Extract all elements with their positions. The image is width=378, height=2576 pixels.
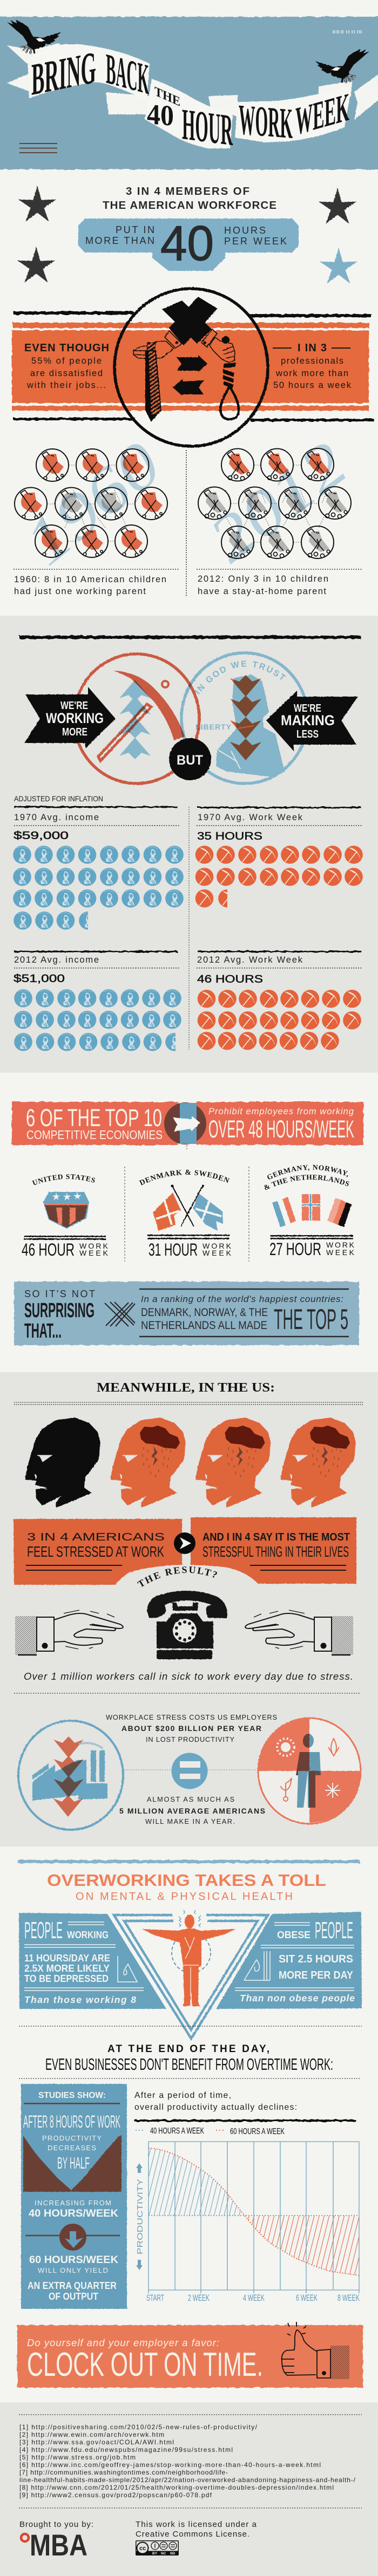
- block: 1970 income: [13, 806, 184, 930]
- stroller 7: [135, 487, 167, 520]
- right text: [273, 342, 352, 390]
- source list: [7] http://communities.washingtontimes.com/neighborhood/life-: [19, 2469, 228, 2476]
- heading: 3 in 4 members: THE AMERICAN WORKFORCE: [103, 199, 276, 212]
- cost text bottom: WILL MAKE IN A YEAR.: [145, 1817, 235, 1825]
- double rule: [147, 1235, 230, 1239]
- left text: [27, 1531, 165, 1560]
- 60 hours curve: [148, 2148, 359, 2275]
- x axis labels: [146, 2293, 360, 2303]
- heading: overworking takes a toll: OVERWORKING TAKES A TOLL: [47, 1871, 326, 1890]
- badge: but: BUT: [177, 753, 203, 768]
- panel: studies show: [21, 2084, 127, 2309]
- block: 2012 income: $51,000: [14, 973, 65, 985]
- circle outline: [114, 289, 268, 446]
- license text: [136, 2520, 257, 2539]
- ranking text: NETHERLANDS ALL MADE: [141, 1319, 267, 1332]
- caption 2012: have a stay-at-home parent: [198, 587, 326, 596]
- icon: up chevrons: [119, 680, 151, 759]
- panel: people working: TO BE DEPRESSED: [24, 1973, 109, 1984]
- icon: pickaxe coin: [74, 654, 199, 783]
- column: germany norway netherlands: [265, 1164, 355, 1259]
- ribbon: making less: LESS: [296, 728, 319, 740]
- legend: [136, 2127, 285, 2136]
- heading: at the end of the day: AT THE END OF THE DAY,: [107, 2043, 269, 2055]
- block: 1970 work week: [195, 807, 363, 908]
- panel: people working: WORKING: [67, 1930, 109, 1940]
- stroller 8 grey: [221, 526, 254, 558]
- stroller 6 grey: [279, 487, 311, 519]
- icon: three flags: [272, 1194, 352, 1227]
- big number 40: 40: [160, 216, 214, 271]
- icon: star top right: [319, 188, 356, 224]
- left text: COMPETITIVE ECONOMIES: [26, 1128, 163, 1142]
- source list: [3] http://www.ssa.gov/oact/COLA/AWI.html: [19, 2438, 174, 2446]
- source list: [6] http://www.inc.com/geoffrey-james/stop-working-more-than-40-hours-a-week.html: [19, 2461, 321, 2469]
- left text: EVEN THOUGH: [24, 342, 109, 354]
- column: denmark and sweden: DENMARK & SWEDEN: [139, 1170, 230, 1185]
- so it's not surprising that: SURPRISING: [24, 1299, 94, 1322]
- left text: [26, 1104, 163, 1142]
- panel: clock out on time: CLOCK OUT ON TIME.: [27, 2346, 263, 2383]
- left text: 3 IN 4 AMERICANS: [27, 1531, 165, 1543]
- source list: [8] http://www.cnn.com/2012/01/25/health/working-overtime-doubles-depression/index.html: [19, 2484, 334, 2491]
- panel: people working: [19, 1913, 166, 2009]
- icon: person circle: [258, 1718, 361, 1824]
- cost text top: [106, 1713, 277, 1743]
- x axis labels: 6 WEEK: [296, 2293, 318, 2303]
- ribbon: working more: [24, 687, 116, 748]
- y axis label: [136, 2163, 145, 2270]
- icon: crossed lines: [105, 1302, 135, 1326]
- panel: studies show: INCREASING FROM: [35, 2199, 111, 2207]
- right text: work more than: [275, 369, 348, 378]
- pick rows: [195, 846, 363, 908]
- double rule: [24, 1236, 106, 1240]
- source list: [1] http://positivesharing.com/2010/02/5-new-rules-of-productivity/: [19, 2423, 258, 2431]
- icon: stressed head 1: [110, 1418, 186, 1508]
- icon: star bottom left: [17, 247, 55, 283]
- ribbon: making less: MAKING: [281, 712, 335, 728]
- badge: creative commons: cc: [139, 2545, 146, 2552]
- title: bring back the 40 hour work week: [31, 42, 349, 155]
- block: 1970 income: 1970 Avg. income: [14, 813, 99, 822]
- stroller 5 grey: [55, 488, 87, 520]
- stroller 1: [221, 449, 254, 481]
- pick rows: [198, 990, 361, 1050]
- panel: studies show: OF OUTPUT: [49, 2291, 98, 2302]
- 27 hour work week: 27 HOUR: [269, 1239, 321, 1259]
- salmon panels: [12, 1102, 363, 1145]
- section: meanwhile in the us: [0, 1372, 378, 1846]
- ranking text: In a ranking of the world's happiest countries:: [141, 1294, 343, 1304]
- grey background: [0, 1372, 378, 1846]
- icon: penny coin: LIBERTY: [195, 723, 232, 731]
- y axis label: PRODUCTIVITY: [136, 2179, 145, 2254]
- stroller 8: [35, 525, 68, 557]
- grey background: [0, 616, 378, 1073]
- stroller 4 grey: [198, 487, 231, 519]
- blue plaque: [78, 219, 299, 271]
- panel: obese people: MORE PER DAY: [279, 1970, 354, 1981]
- panel: people working: PEOPLE: [24, 1917, 63, 1944]
- icon: right arrow: [177, 355, 207, 372]
- legend: 40 HOURS A WEEK: [150, 2127, 204, 2136]
- text: call in sick: Over 1 million workers call in sick to work every day due to stress.: [24, 1671, 353, 1682]
- panel: people working: 11 HOURS/DAY ARE: [24, 1953, 110, 1964]
- put in more than: [85, 224, 154, 246]
- panel: studies show: 40 HOURS/WEEK: [29, 2208, 118, 2219]
- penny rows: [14, 989, 184, 1051]
- grid: [148, 2142, 359, 2293]
- icon: down chevrons: [230, 675, 261, 760]
- right text: I IN 3: [298, 342, 327, 354]
- icon: brown valley: [23, 2135, 122, 2192]
- panel: stress orange: [14, 1517, 356, 1585]
- icon: stressed head 2: [195, 1418, 271, 1508]
- stroller 10: [115, 525, 147, 557]
- banner: top 10 competitive economies: [12, 1102, 363, 1145]
- icon: pointing hand right: [245, 1610, 353, 1655]
- top rule: [19, 636, 361, 639]
- icon: crossed flags: [153, 1185, 223, 1231]
- orange stripes: [12, 323, 369, 411]
- right text: [202, 1531, 350, 1560]
- panel: studies show: PRODUCTIVITY: [42, 2134, 102, 2142]
- header brown rules: [19, 144, 57, 153]
- penny rows: [13, 846, 184, 930]
- icon: leaning wall: [244, 1951, 270, 1980]
- heading: the result: THE RESULT?: [137, 1566, 217, 1587]
- 31 hour work week: 31 HOUR: [148, 1240, 198, 1259]
- 31 hour work week: WORK: [202, 1242, 232, 1250]
- caption 2012: [198, 574, 328, 596]
- caption 2012: 2012: Only 3 in 10 children: [198, 574, 328, 584]
- icon: equals badge: [172, 1753, 207, 1789]
- right text: Prohibit employees from working: [208, 1107, 354, 1116]
- panel: obese people: Than non obese people: [240, 1993, 355, 2003]
- icon: penny coin: [179, 651, 306, 785]
- panel: obese people: OBESE: [277, 1930, 310, 1940]
- panel: people working: Than those working 8: [24, 1994, 136, 2005]
- ranking text: [141, 1294, 348, 1335]
- x axis labels: 4 WEEK: [243, 2293, 265, 2303]
- caption 1960: 1960: 8 in 10 American children: [14, 575, 166, 584]
- source list: [4] http://www.fdu.edu/newspubs/magazine/99su/stress.html: [19, 2446, 233, 2454]
- badge: creative commons: NC: [161, 2552, 166, 2555]
- blue rule: [18, 1860, 360, 1863]
- heading: at the end of the day: [45, 2043, 333, 2074]
- heading: overworking takes a toll: [47, 1871, 326, 1903]
- block: 1970 work week: 35 HOURS: [197, 830, 262, 842]
- heading: 3 in 4 members: [103, 185, 276, 212]
- x axis labels: START: [146, 2293, 164, 2303]
- hatch areas: [148, 2148, 244, 2216]
- source list: line-healthful-habits-made-simple/2012/apr/22/nation-overworked-abandoning-happiness-and-health-/: [19, 2476, 356, 2484]
- left text: [24, 342, 109, 390]
- heading: 3 in 4 members: 3 IN 4 MEMBERS OF: [126, 185, 249, 197]
- left text: are dissatisfied: [30, 369, 103, 378]
- icon: factory circle: [18, 1721, 123, 1830]
- badge: but: [169, 738, 211, 780]
- cost text bottom: ALMOST AS MUCH AS: [147, 1795, 234, 1803]
- block: 2012 work week: [197, 951, 362, 1050]
- stroller 3: [301, 448, 334, 481]
- title: bring back the 40 hour work week: WORK: [239, 96, 293, 148]
- source list: [5] http://www.stress.org/job.htm: [19, 2454, 136, 2461]
- icon: star top left: [18, 186, 56, 222]
- 27 hour work week: WORK: [326, 1241, 355, 1249]
- license text: Creative Commons License.: [136, 2530, 249, 2539]
- title: bring back the 40 hour work week: BRING: [31, 42, 96, 105]
- script year 1960: 1960: [11, 428, 174, 578]
- icon: hazard triangle: [118, 1956, 137, 1982]
- banner ribbon: [28, 44, 352, 148]
- stroller 4: [15, 488, 47, 520]
- put in more than: PUT IN: [116, 224, 154, 235]
- legend: 60 HOURS A WEEK: [230, 2127, 285, 2136]
- x axis labels: 2 WEEK: [188, 2293, 210, 2303]
- section: footer sources: [0, 2402, 378, 2576]
- badge: creative commons: [136, 2540, 179, 2555]
- caption 1960: [14, 575, 166, 596]
- panel: happiest countries: [14, 1282, 359, 1345]
- column: united states: UNITED STATES: [32, 1174, 95, 1185]
- so it's not surprising that: SO IT'S NOT: [24, 1289, 95, 1299]
- title: bring back the 40 hour work week: BACK: [106, 44, 149, 104]
- note: adjusted for inflation: ADJUSTED FOR INFLATION: [14, 794, 103, 803]
- grey background: [0, 2402, 378, 2576]
- icon: thumbs up: [282, 2322, 349, 2379]
- text: productivity declines: overall productivity actually declines:: [134, 2103, 297, 2112]
- block: 1970 work week: 1970 Avg. Work Week: [198, 813, 303, 822]
- column: united states: [22, 1174, 109, 1259]
- ribbon: working more: WE'RE: [60, 700, 88, 712]
- text: productivity declines: [134, 2091, 297, 2112]
- 46 hour work week: 46 HOUR: [22, 1240, 75, 1259]
- icon: tie: [145, 343, 161, 421]
- icon: telephone: [147, 1591, 227, 1659]
- left text: with their jobs...: [26, 380, 106, 390]
- 40 hours baseline: [148, 2215, 359, 2216]
- text: productivity declines: After a period of time,: [134, 2091, 231, 2100]
- block: 2012 income: 2012 Avg. income: [14, 955, 99, 965]
- right text: professionals: [281, 356, 343, 366]
- right text: AND I IN 4 SAY IT IS THE MOST: [202, 1531, 350, 1543]
- caption 1960: had just one working parent: [14, 587, 146, 596]
- stroller 7 grey: [319, 487, 351, 519]
- ribbon: working more: MORE: [62, 726, 87, 738]
- cost text bottom: [119, 1795, 265, 1825]
- badge: creative commons: ND: [170, 2552, 176, 2555]
- icon: penny coin: IN GOD WE TRUST: [194, 660, 286, 694]
- header panel: [0, 17, 378, 169]
- panel: studies show: WILL ONLY YIELD: [38, 2266, 108, 2274]
- right text: [208, 1107, 354, 1143]
- source list: [19, 2423, 356, 2499]
- header blue band: [0, 17, 378, 169]
- panel: 40 hours per week: [78, 216, 299, 271]
- script year 2012: 2012: [196, 427, 360, 576]
- ranking text: DENMARK, NORWAY, & THE: [141, 1306, 268, 1319]
- badge: creative commons: BY: [152, 2552, 158, 2555]
- icon: left eagle: [7, 20, 62, 54]
- logo: mba: MBA: [30, 2528, 87, 2562]
- icon: arrow circle: [164, 1102, 206, 1144]
- heading: MEANWHILE, IN THE US:: [97, 1381, 275, 1395]
- panel: obese people: [216, 1912, 362, 2009]
- 31 hour work week: WEEK: [202, 1249, 232, 1257]
- icon: left arrow: [173, 379, 204, 396]
- icon: stressed figure: [142, 1910, 235, 2006]
- stroller 2: [261, 449, 293, 481]
- left text: 55% of people: [31, 356, 102, 366]
- black rules: [14, 311, 374, 421]
- stroller 6 grey: [95, 488, 127, 520]
- chart: 2012 strollers: [198, 448, 351, 558]
- heading: overworking takes a toll: ON MENTAL & PHYSICAL HEALTH: [76, 1891, 293, 1903]
- so it's not surprising that: [24, 1289, 95, 1342]
- left text: FEEL STRESSED AT WORK: [27, 1543, 164, 1560]
- cost text bottom: 5 MILLION AVERAGE AMERICANS: [119, 1807, 265, 1815]
- icon: right eagle: [315, 49, 369, 83]
- icon: black head: [25, 1418, 100, 1508]
- ribbon: making less: [266, 691, 358, 751]
- section: working more making less: [0, 616, 378, 1073]
- icon: cuffs and hands: [133, 329, 235, 363]
- icon: shield: [43, 1192, 89, 1229]
- source list: [9] http://www2.census.gov/prod2/popscan/p60-078.pdf: [19, 2491, 212, 2499]
- block: 2012 work week: 46 HOURS: [197, 973, 263, 985]
- panel: obese people: SIT 2.5 HOURS: [279, 1953, 353, 1965]
- cost text top: ABOUT $200 BILLION PER YEAR: [122, 1724, 261, 1733]
- title: bring back the 40 hour work week: 40: [147, 98, 174, 132]
- panel: orange job dissatisfaction band: [12, 289, 374, 446]
- title: bring back the 40 hour work week: THE: [154, 84, 180, 110]
- 27 hour work week: WEEK: [326, 1248, 355, 1257]
- cost text top: IN LOST PRODUCTIVITY: [146, 1735, 234, 1743]
- stroller 9 grey: [261, 526, 293, 558]
- so it's not surprising that: THAT...: [24, 1320, 62, 1342]
- right text: 50 hours a week: [273, 380, 352, 390]
- license text: This work is licensed under a: [136, 2520, 257, 2529]
- ribbon: working more: WORKING: [46, 710, 104, 726]
- icon: star bottom right: [320, 248, 357, 284]
- tiny header ticks: [333, 30, 361, 33]
- stroller 10 grey: [301, 526, 334, 558]
- 46 hour work week: WEEK: [79, 1249, 109, 1257]
- ribbon: making less: WE'RE: [294, 703, 321, 714]
- stroller 2: [76, 449, 109, 481]
- panel: people working: 2.5X MORE LIKELY: [24, 1963, 110, 1974]
- panel: clock out on time: [17, 2322, 363, 2388]
- 46 hour work week: WORK: [79, 1242, 109, 1250]
- text: AFTER 8 HOURS OF WORK: [23, 2112, 120, 2131]
- chart: productivity over time: [136, 2142, 360, 2303]
- double rule: [271, 1235, 353, 1239]
- block: 2012 income: [14, 951, 184, 1051]
- panel: studies show: AN EXTRA QUARTER: [28, 2280, 117, 2291]
- left text: 6 OF THE TOP 10: [26, 1104, 162, 1132]
- panel: studies show: DECREASES: [48, 2144, 96, 2152]
- icon: pointing hand left: [15, 1610, 123, 1655]
- panel: studies show: 60 HOURS/WEEK: [29, 2254, 118, 2266]
- title: bring back the 40 hour work week: HOUR: [182, 99, 233, 155]
- stroller 3: [117, 449, 149, 481]
- panel: clock out on time: Do yourself and your employer a favor:: [27, 2337, 219, 2348]
- put in more than: MORE THAN: [85, 235, 154, 246]
- icon: crossed sleeves: [162, 297, 218, 345]
- source list: [2] http://www.ewin.com/arch/overwk.htm: [19, 2431, 164, 2438]
- stroller 1: [36, 449, 69, 481]
- chart: 1960 strollers: [15, 449, 167, 557]
- cost text top: WORKPLACE STRESS COSTS US EMPLOYERS: [106, 1713, 277, 1721]
- brought to you by: Brought to you by:: [19, 2520, 93, 2529]
- stroller 5 grey: [239, 487, 271, 519]
- hours per week: PER WEEK: [224, 236, 287, 247]
- column: germany norway netherlands: & THE NETHERLANDS: [265, 1175, 349, 1190]
- x axis labels: 8 WEEK: [338, 2293, 360, 2303]
- panel: studies show: BY HALF: [57, 2154, 90, 2172]
- column: denmark and sweden: [139, 1170, 232, 1259]
- icon: triangle frame: [114, 1915, 268, 2039]
- stroller 9: [76, 525, 108, 557]
- icon: down arrow badge: [25, 2224, 120, 2251]
- block: 1970 income: $59,000: [14, 830, 69, 842]
- block: 2012 work week: 2012 Avg. Work Week: [197, 955, 303, 965]
- hours per week: [224, 225, 287, 247]
- hours per week: HOURS: [224, 225, 266, 236]
- ribbon tails and folds: [7, 43, 378, 120]
- column: germany norway netherlands: GERMANY, NORWAY,: [267, 1164, 348, 1180]
- icon: stressed head 3: [280, 1418, 356, 1508]
- icon: noose: [220, 363, 239, 419]
- arrow badge: [174, 1532, 195, 1554]
- panel: studies show: STUDIES SHOW:: [38, 2091, 106, 2100]
